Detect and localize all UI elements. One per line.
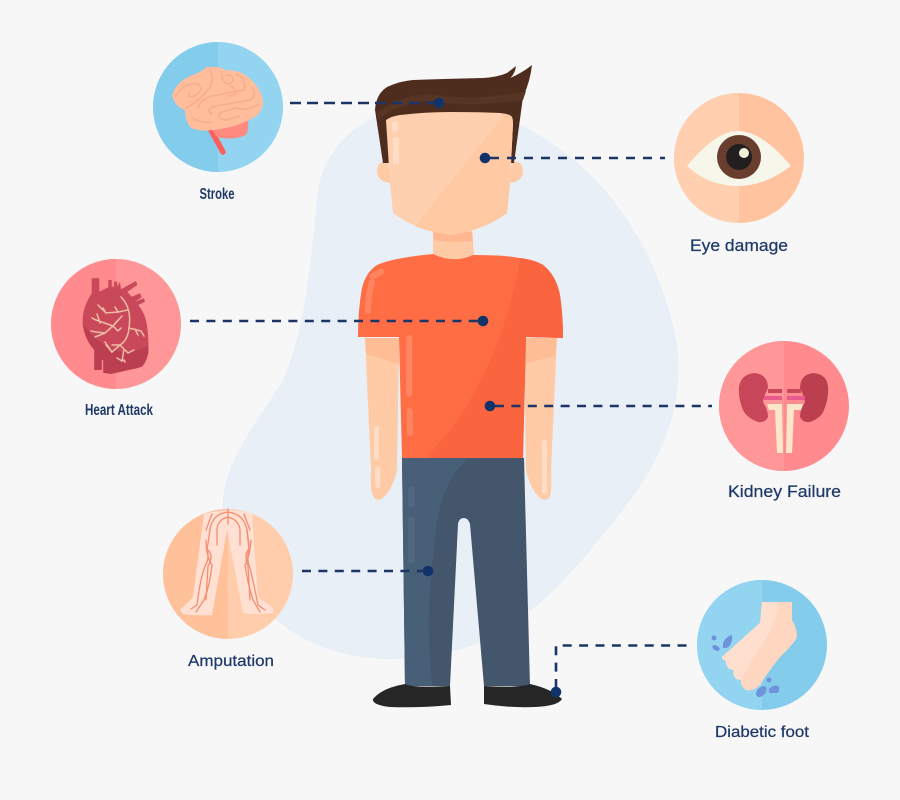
label: Diabetic foot: Diabetic foot <box>715 724 810 741</box>
label: Stroke: Stroke <box>200 186 235 203</box>
person figure <box>358 65 563 707</box>
hair <box>375 65 532 163</box>
icon: eye <box>674 93 804 223</box>
connector: eye damage <box>480 153 665 163</box>
icon: heart <box>51 259 181 389</box>
right arm <box>524 338 557 500</box>
face <box>386 112 513 235</box>
connector: heart attack <box>190 316 488 326</box>
connector: kidney failure <box>485 401 712 411</box>
label: Eye damage: Eye damage <box>690 236 788 255</box>
shirt <box>358 254 563 458</box>
label: Heart Attack: Heart Attack <box>85 402 153 419</box>
trousers <box>402 458 530 686</box>
icon: legs with veins <box>163 509 293 639</box>
left arm <box>365 338 399 500</box>
connector: stroke <box>290 98 444 108</box>
background blob <box>223 106 678 659</box>
neck <box>433 228 474 261</box>
icon: brain <box>153 42 283 172</box>
connector: amputation <box>302 566 433 576</box>
connector: diabetic foot <box>551 646 690 697</box>
shoes <box>373 684 562 707</box>
icon: kidneys <box>719 341 849 471</box>
label: Amputation: Amputation <box>188 653 274 670</box>
label: Kidney Failure: Kidney Failure <box>728 482 841 501</box>
ears <box>377 162 523 183</box>
icon: foot <box>697 580 827 710</box>
